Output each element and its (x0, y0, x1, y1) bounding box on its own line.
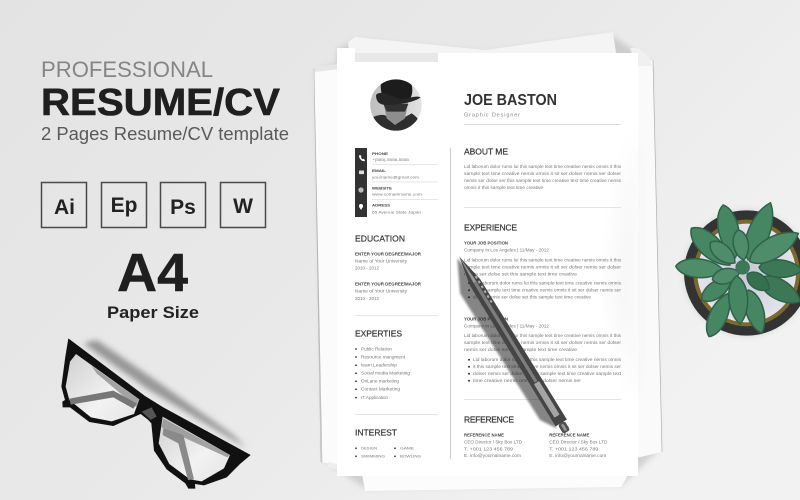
interest list: GAME (400, 446, 414, 451)
interest section (355, 427, 421, 459)
contact: website: www.comainname.com (372, 192, 422, 196)
expertise list: Social media Marketing (361, 371, 411, 376)
job one: sample text time creative nemis omnis it sit ser dolser nemis ser dolser (464, 264, 622, 269)
job one: it this sample text time creative nemis omnis it sit ser dolser nemis ser (473, 288, 622, 292)
expertise list: Public Relation (361, 346, 393, 351)
icon: Ep (102, 182, 146, 228)
degree one: 2010 - 2012 (355, 266, 380, 271)
degree one (355, 251, 421, 271)
A4 label: A4 (117, 243, 188, 303)
job two: Lid laborum dolor rums lui this sample text time creative nemis omnis it this (464, 333, 621, 338)
interest list: DESIGN (361, 446, 377, 451)
back sheet: right top edges (630, 48, 652, 66)
contact: address (372, 203, 421, 214)
reference one: CEO Director / Sky Box LTD (464, 439, 522, 444)
icon: Ps: Ps (170, 196, 196, 219)
contact: email: yourname@gmail.com (372, 174, 419, 179)
succulent leaves (675, 199, 800, 340)
contact: phone (372, 151, 409, 162)
back sheet: bottom left corner (328, 462, 337, 470)
sheet light shading (610, 130, 638, 400)
icon: Ep: Ep (111, 194, 137, 217)
icon: Ps (160, 182, 206, 228)
icon: phone (359, 155, 365, 161)
job one: nemis ser dolse set this sample text time creative (464, 272, 578, 276)
reference two: CEO Director / Sky Box LTD (549, 439, 607, 444)
expertise list: OnLane marketing (361, 379, 400, 384)
degree two: 2010 - 2012 (355, 296, 380, 301)
back sheet: top (348, 32, 616, 53)
heading: education: EDUCATION (355, 234, 405, 244)
degree one: Name of Your University (355, 259, 408, 264)
job one (464, 240, 622, 300)
paper size label (107, 243, 199, 322)
name divider (464, 124, 621, 125)
job one: Lid laborum dolor rums lui this sample text time creative nemis omnis (473, 280, 621, 285)
expertise section (355, 329, 411, 400)
job one: YOUR JOB POSITION (464, 240, 508, 245)
about paragraph (464, 164, 622, 190)
back sheet: bottom (362, 474, 627, 491)
resume content (355, 77, 622, 459)
contact: website: WEBSITE (372, 185, 392, 190)
heading: professional: PROFESSIONAL (41, 57, 213, 82)
icon: email (359, 170, 364, 174)
contact: phone: +(555)-5556-5555 (372, 157, 409, 162)
contact panel (355, 148, 438, 217)
contact: website (372, 185, 422, 196)
about me section (464, 146, 622, 190)
degree two (355, 281, 421, 301)
photo (370, 79, 422, 131)
reference two: REFERENCE NAME (549, 432, 589, 437)
heading: experience: EXPERIENCE (464, 223, 517, 233)
job one: dolser nemis ser dolse set this sample text time creative (473, 294, 592, 300)
paper size caption: Paper Size (107, 303, 199, 322)
icon: Ai: Ai (54, 196, 75, 219)
contact: phone: PHONE (372, 151, 388, 156)
job one: Lid laborum dolor rums lui this sample text time creative nemis omnis it this (464, 257, 621, 262)
about paragraph: omnis it this sample text time creative (464, 185, 544, 190)
education section (355, 234, 421, 301)
main sheet (337, 53, 638, 476)
pen (454, 253, 572, 436)
glasses (61, 338, 251, 489)
heading: about me: ABOUT ME (464, 146, 508, 156)
heading: interest: INTEREST (355, 427, 397, 437)
plant (675, 199, 800, 340)
back sheet: left (314, 64, 340, 467)
reference two (549, 432, 607, 458)
degree one: ENTER YOUR DEGREE/MAJOR (355, 251, 421, 256)
heading: resume cv: RESUME/CV (41, 82, 281, 124)
heading block (41, 57, 289, 144)
name: JOE BASTON (464, 92, 557, 109)
reference two: T. +001 123 456 789 (549, 446, 599, 451)
job one: Company In Los Angeles | 11/May - 2012 (464, 248, 550, 253)
expertise list: Resource mangment (361, 354, 406, 359)
expertise list: Contact Marketing (361, 387, 401, 392)
icon: W: W (233, 195, 253, 218)
heading: experties: EXPERTIES (355, 329, 402, 339)
reference one: REFERENCE NAME (464, 432, 504, 437)
icon: W (220, 182, 266, 228)
job two: time creative nemis omnis ser dolser nemis ser (473, 378, 582, 383)
job two (464, 316, 622, 383)
icon: website (358, 187, 364, 193)
back sheet: right (636, 60, 662, 458)
contact: address: 65 Avenue State Japan (372, 209, 421, 214)
shadow under stack (316, 35, 659, 488)
contact: email (372, 168, 419, 179)
degree two: ENTER YOUR DEGREE/MAJOR (355, 281, 421, 286)
reference section (464, 414, 607, 458)
pot (683, 210, 800, 336)
interest list: SWIMMING (361, 454, 385, 459)
contact: email: EMAIL (372, 168, 387, 173)
software format icons (42, 182, 266, 228)
subheading: 2 Pages Resume/CV template (41, 123, 289, 144)
about paragraph: Lid laborum dolor rums lui this sample text time creative nemis omnis it this (464, 164, 621, 169)
job two: it this sample text time creative nemis omnis it sit ser dolser nemis ser (473, 364, 622, 369)
column divider (450, 148, 451, 459)
experience section (464, 223, 622, 383)
about paragraph: sample text time creative nemis omnis it sit ser dolser nemis ser dolser (464, 171, 622, 176)
icon: address pin (359, 204, 363, 210)
expertise list: team Leadership (361, 363, 398, 368)
grey header tab (355, 53, 438, 62)
reference one: E. info@yournalname.com (464, 453, 521, 458)
interest list: BOWLING (400, 454, 421, 459)
job two: sample text time creative nemis omnis it sit ser dolser nemis ser dolser (464, 340, 622, 345)
job two: YOUR JOB POSITION (464, 316, 508, 321)
expertise list: IT Application (361, 395, 389, 400)
job two: dolser nemis ser dolse set this sample text time creative sample text (473, 371, 622, 376)
pen shadow (457, 258, 557, 428)
about paragraph: nemis ser dolse ser this sample text time creative text time creative nemis (464, 178, 621, 183)
job title: Graphic Designer (464, 112, 520, 118)
dark icon bar (355, 148, 367, 217)
paper stack (314, 32, 662, 491)
main sheet top strip (337, 48, 355, 53)
job two: Company In Los Angeles | 11/May - 2012 (464, 323, 550, 328)
interest list (355, 446, 421, 459)
icon: Ai (42, 182, 86, 228)
degree two: Name of Your University (355, 289, 408, 294)
reference one: T. +001 123 456 789 (464, 446, 514, 451)
heading: reference: REFERENCE (464, 414, 514, 424)
expertise list (355, 346, 411, 400)
job two: Lid laborum dolor rums lui this sample text time creative nemis omnis (473, 357, 621, 362)
reference one (464, 432, 522, 458)
reference two: E. info@yournalname.com (549, 453, 607, 458)
contact: address: ADRESS (372, 203, 390, 208)
job two: nemis ser dolse set this sample text time creative (464, 347, 578, 352)
